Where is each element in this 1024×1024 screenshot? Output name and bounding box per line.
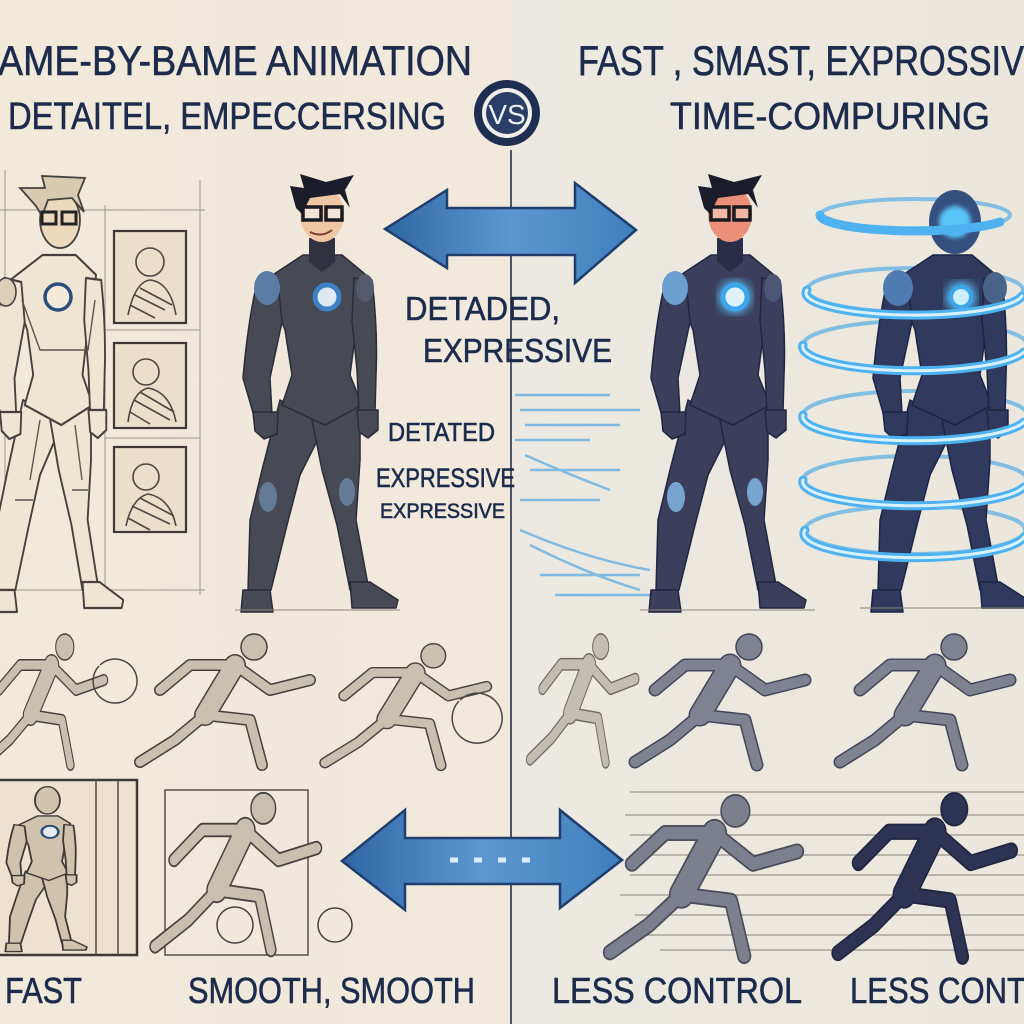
- fast runner: dark: [838, 793, 1011, 957]
- label: small expressive stack: [376, 417, 515, 523]
- fast runner: grey: [610, 795, 797, 956]
- running sequence: right sketches: [530, 634, 1010, 765]
- bottom labels: SMOOTH, SMOOTH: [188, 970, 475, 1011]
- title: left panel: AME-BY-BAME ANIMATION: [0, 37, 472, 84]
- title: left panel: DETAITEL, EMPECCERSING: [8, 96, 446, 138]
- storyboard box: running sketch: [155, 790, 352, 955]
- arrow highlight dots: [450, 858, 535, 862]
- label: detailed, expressive: [405, 290, 612, 369]
- storyboard frames: [114, 231, 186, 532]
- top double arrow: [385, 183, 636, 283]
- title: left panel: [0, 37, 472, 138]
- storyboard grid lines: [0, 170, 205, 600]
- bottom labels: [5, 970, 1024, 1011]
- dark character: left: [241, 174, 398, 612]
- title: right panel: [578, 37, 1024, 138]
- label: small expressive stack: EXPRESSIVE: [376, 463, 515, 493]
- VS badge: [474, 80, 540, 146]
- VS badge: VS: [488, 99, 526, 130]
- bottom labels: LESS CONTROL: [552, 970, 802, 1011]
- title: right panel: TIME-COMPURING: [670, 96, 990, 138]
- storyboard box: standing sketch: [0, 780, 137, 955]
- dark character: right: [649, 174, 806, 612]
- motion lines: lower right: [620, 792, 1024, 950]
- bottom double arrow: [342, 810, 622, 910]
- label: small expressive stack: DETATED: [388, 417, 495, 447]
- label: detailed, expressive: DETADED,: [405, 290, 560, 327]
- ground shadow strokes: [235, 608, 1024, 610]
- speed lines: right panel: [515, 395, 650, 595]
- bottom labels: FAST: [5, 970, 82, 1011]
- spinning rings: behind robot: [803, 199, 1024, 554]
- sketch figure: left: [0, 176, 123, 612]
- running sequence: left sketches: [0, 634, 502, 766]
- label: detailed, expressive: EXPRESSIVE: [423, 332, 612, 369]
- robot character: [871, 190, 1024, 612]
- spinning rings: in front of robot: [803, 215, 1024, 558]
- center divider: [510, 150, 512, 1024]
- label: small expressive stack: EXPRESSIVE: [380, 500, 505, 523]
